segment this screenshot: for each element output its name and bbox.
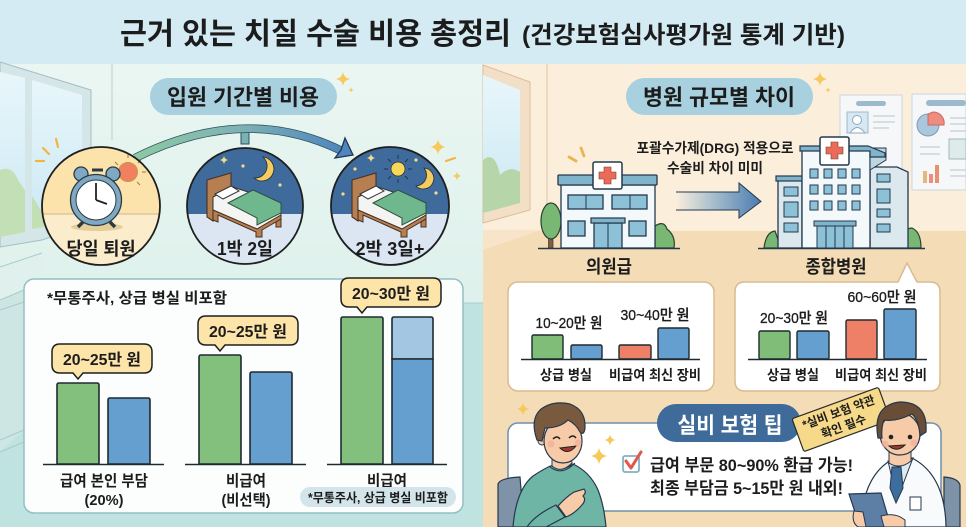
icon: sun [115, 154, 146, 185]
circle: 2박 3일+: 2박 3일+ [356, 239, 424, 259]
stars [220, 156, 282, 187]
panel: hospital costs [735, 263, 940, 391]
bars: group 1 [43, 383, 164, 464]
bubble: group 2: 20~25만 원 [209, 323, 287, 341]
axis labels [767, 367, 927, 383]
text: refund: 급여 부문 80~90% 환급 가능! [650, 456, 853, 475]
labels: group 3: *무통주사, 상급 병실 비포함 [308, 490, 448, 505]
bars [748, 309, 927, 360]
arrow: clinic to hospital [676, 183, 761, 218]
bars [521, 328, 700, 360]
values [760, 289, 916, 327]
circle: 당일 퇴원: 당일 퇴원 [66, 239, 136, 259]
title: 근거 있는 치질 수술 비용 총정리 [120, 18, 511, 51]
panel: stay cost chart [24, 278, 463, 513]
labels: group 3: 비급여 [367, 472, 407, 490]
text: DRG note: 포괄수가제(DRG) 적용으로 [636, 140, 794, 156]
label: 의원급: 의원급 [586, 257, 632, 277]
icon: clinic building [538, 162, 680, 248]
text: final cost: 최종 부담금 5~15만 원 내외! [650, 479, 843, 498]
values: 10~20만 원 [536, 315, 602, 332]
axis labels: 비급여 최신 장비 [835, 367, 927, 383]
circle: 당일 퇴원 [40, 147, 162, 274]
icon: bed [207, 173, 281, 237]
icon: moon [254, 157, 274, 181]
accents: clinic [569, 148, 584, 161]
stars [341, 154, 438, 196]
sparkle: left heading [336, 72, 354, 93]
background: right panel [483, 64, 966, 527]
panel: clinic costs [508, 282, 714, 391]
circle: 1박 2일 [186, 147, 304, 265]
bubble: group 2 [198, 316, 298, 351]
labels: group 2: 비급여 [226, 472, 266, 490]
title [120, 18, 845, 51]
illustration: doctor [849, 402, 960, 527]
icon: bed [352, 173, 426, 237]
heading: 병원 규모별 차이: 병원 규모별 차이 [643, 85, 795, 110]
sparkles: right of third circle [430, 139, 461, 180]
background: left panel [0, 64, 483, 527]
label: 종합병원: 종합병원 [806, 257, 866, 277]
axis labels [540, 367, 701, 383]
heading: 실비 보험 팁 [657, 404, 801, 442]
axis labels: 상급 병실 [767, 367, 819, 383]
window: right [483, 65, 541, 250]
bubble: group 1: 20~25만 원 [63, 351, 141, 369]
note: *무통주사, 상급 병실 비포함 [47, 290, 227, 307]
values [536, 307, 690, 332]
heading: 병원 규모별 차이 [626, 78, 813, 115]
values: 60~60만 원 [848, 289, 916, 306]
labels: group 2: (비선택) [222, 492, 271, 509]
labels: group 1: 급여 본인 부담 [60, 472, 148, 490]
sparkles: patient [517, 403, 616, 464]
arrow: hospital stay progression [135, 129, 353, 158]
illustration: patient [498, 403, 606, 527]
tag: read terms: *실비 보험 약관 [800, 392, 877, 432]
circle: 2박 3일+ [330, 146, 450, 266]
circle: 1박 2일: 1박 2일 [217, 239, 273, 259]
axis labels: 비급여 최신 장비 [609, 367, 701, 383]
values: 20~30만 원 [760, 310, 828, 327]
labels: group 2 [222, 472, 271, 509]
bars: group 2 [185, 355, 306, 464]
text: DRG note: 수술비 차이 미미 [667, 160, 763, 176]
icon: alarm clock [70, 167, 123, 231]
bubble: group 3: 20~30만 원 [352, 285, 430, 303]
window: left [0, 62, 91, 247]
header band [0, 0, 966, 64]
wall documents [840, 94, 966, 190]
labels: group 3 [300, 472, 456, 507]
icon: sun and moon [384, 155, 434, 189]
tag: read terms [792, 387, 890, 452]
bars: group 3 [327, 317, 447, 464]
heading: 입원 기간별 비용 [150, 78, 337, 115]
tag: read terms: 확인 필수 [819, 411, 868, 441]
labels: group 1: (20%) [84, 492, 124, 509]
title: (건강보험심사평가원 통계 기반) [522, 22, 845, 49]
axis labels: 상급 병실 [540, 367, 592, 383]
bubble: group 1 [52, 344, 152, 379]
accents: sun rays left [36, 139, 58, 161]
icon: general hospital building [758, 137, 925, 248]
sparkle: right heading [813, 72, 831, 93]
heading: 실비 보험 팁: 실비 보험 팁 [678, 413, 782, 438]
labels: group 1 [60, 472, 148, 509]
icon: checkbox [623, 452, 641, 472]
text: DRG note [636, 140, 794, 176]
bubble: group 3 [341, 278, 441, 313]
values: 30~40만 원 [620, 307, 690, 324]
heading: 입원 기간별 비용: 입원 기간별 비용 [167, 85, 319, 110]
panel: insurance tip [508, 423, 941, 511]
